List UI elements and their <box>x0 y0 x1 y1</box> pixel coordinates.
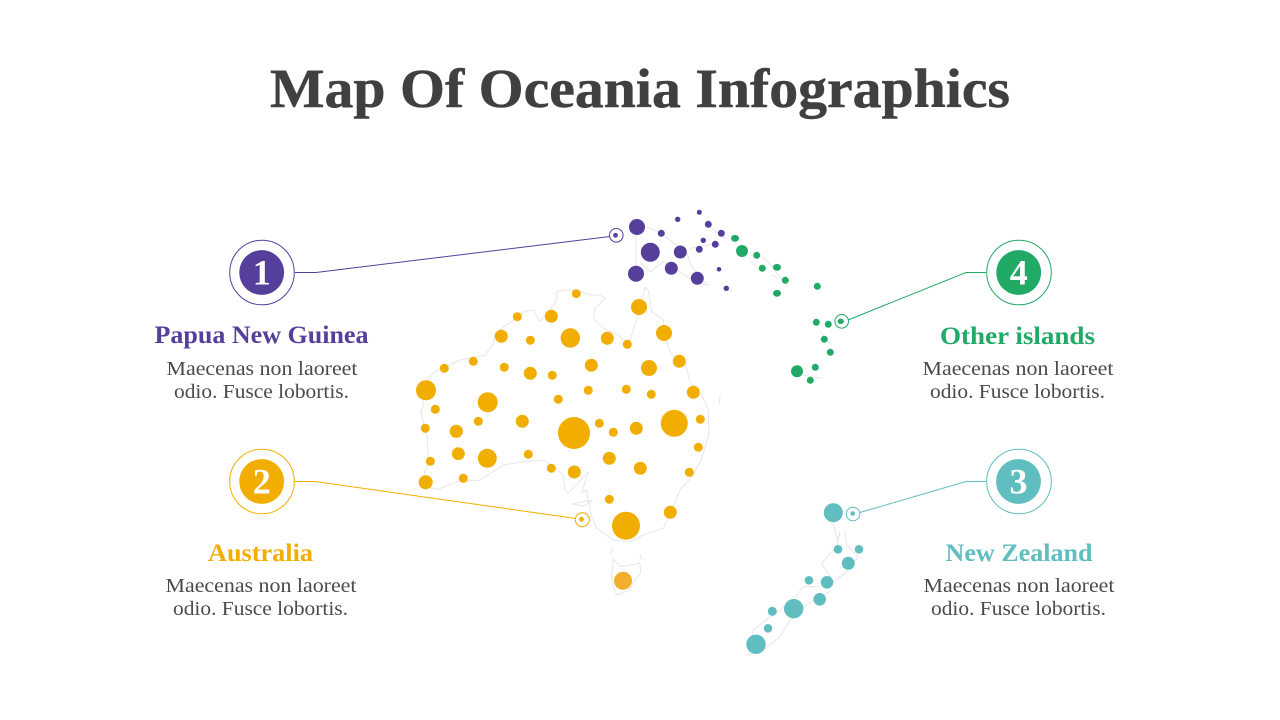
connector line 2 <box>295 482 576 518</box>
text block 1 <box>166 358 358 403</box>
number badge 1 <box>230 240 294 305</box>
map outline: New Zealand <box>748 522 858 655</box>
text block 2: odio. Fusce lobortis. <box>173 598 348 620</box>
text block 3: Maecenas non laoreet <box>924 575 1115 597</box>
text block 2: Maecenas non laoreet <box>166 575 357 597</box>
text block 1: Maecenas non laoreet <box>166 358 358 380</box>
heading: Papua New Guinea: Papua New Guinea <box>154 322 369 349</box>
connector line 4 <box>848 272 986 320</box>
map marker 1 <box>610 228 623 242</box>
number badge 3: 3 <box>1010 462 1028 502</box>
number badge 4: 4 <box>1010 252 1028 292</box>
text block 1: odio. Fusce lobortis. <box>174 381 349 403</box>
text block 4: Maecenas non laoreet <box>922 358 1114 380</box>
map marker 4 <box>835 314 848 328</box>
number badge 1: 1 <box>253 252 271 292</box>
heading: Australia: Australia <box>208 540 314 567</box>
callout 2: Australia <box>166 449 589 620</box>
dots: Australia <box>416 289 705 590</box>
text block 3 <box>924 575 1115 620</box>
heading: Other islands: Other islands <box>940 323 1095 350</box>
heading: New Zealand: New Zealand <box>946 540 1093 567</box>
callout 1: Papua New Guinea <box>154 228 623 403</box>
number badge 2 <box>230 449 294 514</box>
dots: New Zealand <box>746 503 863 654</box>
number badge 2: 2 <box>253 462 271 502</box>
connector line 3 <box>860 482 986 512</box>
map: Oceania coastlines <box>420 227 858 655</box>
callout 4: Other islands <box>835 240 1114 403</box>
map outline: Papua New Guinea and islands <box>636 227 830 378</box>
dots: Other islands <box>731 235 834 384</box>
dots: Papua New Guinea <box>628 210 729 291</box>
number badge 4 <box>987 240 1051 305</box>
text block 4 <box>922 358 1114 403</box>
text block 3: odio. Fusce lobortis. <box>931 598 1106 620</box>
callout 3: New Zealand <box>846 449 1115 620</box>
map outline: Australia and Tasmania <box>420 287 720 595</box>
title: Map Of Oceania Infographics <box>270 58 1010 119</box>
number badge 3 <box>987 449 1051 514</box>
text block 4: odio. Fusce lobortis. <box>930 381 1105 403</box>
text block 2 <box>166 575 357 620</box>
map marker 2 <box>575 513 589 527</box>
connector line 1 <box>295 236 610 272</box>
map marker 3 <box>846 507 860 521</box>
